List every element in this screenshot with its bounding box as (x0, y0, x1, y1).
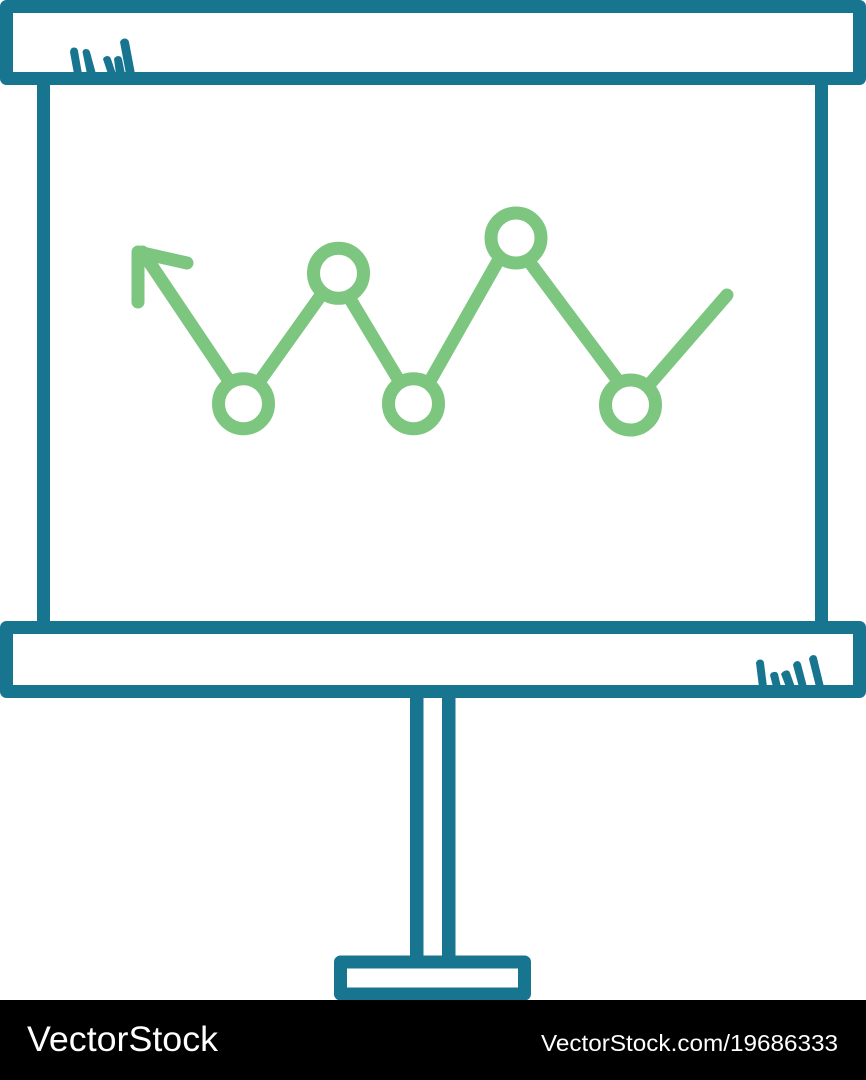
stand base (340, 962, 524, 994)
icon: top bar tick marks (70, 38, 135, 74)
image id url: VectorStock.com/19686333 (541, 1030, 838, 1056)
stand pole (410, 695, 456, 960)
line chart with arrow (138, 213, 727, 430)
icon: bottom bar tick marks (756, 655, 824, 687)
brand name: VectorStock (27, 1019, 218, 1059)
screen side rails (37, 80, 828, 625)
bottom housing bar (6, 628, 860, 692)
arrowhead (138, 252, 187, 302)
chart line (142, 238, 727, 405)
footer watermark bar (0, 1000, 866, 1080)
data points (218, 213, 656, 430)
top housing bar (6, 6, 860, 78)
